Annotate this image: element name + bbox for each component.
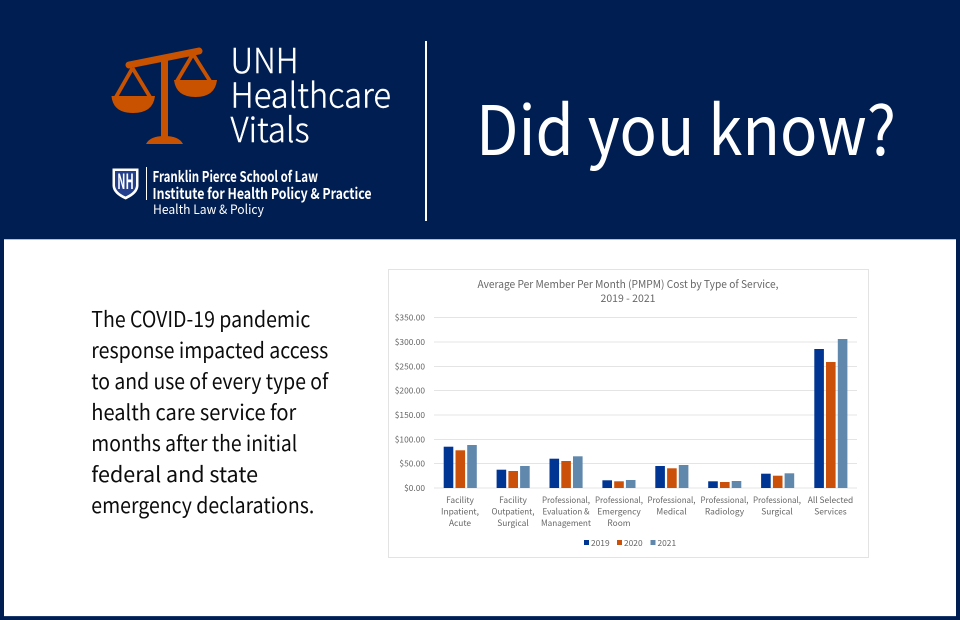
legend [584, 537, 676, 549]
category labels: Professional, [753, 494, 801, 506]
category labels [441, 494, 853, 529]
y axis labels: $50.00 [399, 458, 425, 470]
category labels: Services [814, 506, 847, 518]
bars: 2021 [467, 339, 847, 488]
icon: scales of justice [112, 51, 217, 144]
y axis labels: $350.00 [395, 312, 425, 324]
category labels: Professional, [542, 494, 590, 506]
category labels: Facility [499, 494, 528, 506]
category labels: Acute [449, 517, 471, 529]
logo wordmark: UNH Healthcare Vitals: Healthcare [230, 68, 391, 118]
category labels: Facility [446, 494, 475, 506]
institution names: Institute for Health Policy & Practice [152, 183, 372, 204]
body text: federal and state [91, 458, 258, 489]
chart: average PMPM cost by type of service [388, 270, 868, 558]
bars: 2019 [444, 349, 824, 488]
body text: The COVID-19 pandemic [91, 303, 310, 334]
icon: UNH shield [112, 166, 138, 200]
body text: response impacted access [91, 334, 328, 365]
category labels: Professional, [648, 494, 696, 506]
category labels: Surgical [497, 517, 529, 529]
category labels: Emergency [597, 506, 641, 518]
legend: 2019 [591, 537, 610, 549]
institution names: Health Law & Policy [153, 199, 264, 218]
chart title: Average Per Member Per Month (PMPM) Cost by Type of Service, [478, 277, 779, 292]
category labels: Radiology [705, 506, 745, 518]
header divider [425, 41, 427, 221]
icon: UNH shield: NH [117, 166, 134, 196]
y axis labels: $150.00 [395, 409, 425, 421]
body text [91, 303, 329, 520]
chart title [478, 277, 779, 306]
category labels: All Selected [808, 494, 853, 506]
category labels: Medical [656, 506, 687, 518]
body text: months after the initial [91, 427, 297, 458]
category labels: Professional, [700, 494, 748, 506]
category labels: Management [541, 517, 592, 529]
y axis labels [395, 312, 425, 494]
y axis labels: $250.00 [395, 360, 425, 372]
category labels: Surgical [761, 506, 793, 518]
y axis labels: $0.00 [404, 482, 425, 494]
logo divider [146, 167, 147, 200]
content panel [4, 239, 956, 616]
body text: emergency declarations. [91, 489, 314, 520]
category labels: Professional, [595, 494, 643, 506]
institution names: Franklin Pierce School of Law [152, 166, 318, 187]
institution names [152, 166, 372, 218]
category labels: Inpatient, [441, 506, 479, 518]
logo wordmark: UNH Healthcare Vitals: UNH [230, 34, 298, 83]
body text: to and use of every type of [91, 365, 329, 396]
category labels: Outpatient, [492, 506, 534, 518]
y axis labels: $100.00 [395, 434, 425, 446]
chart title: 2019 - 2021 [601, 291, 656, 306]
category labels: Evaluation & [542, 506, 590, 518]
category labels: Room [607, 517, 631, 529]
legend: 2021 [658, 537, 676, 549]
logo wordmark: UNH Healthcare Vitals: Vitals [230, 103, 310, 152]
y axis labels: $200.00 [395, 384, 425, 396]
body text: health care service for [91, 396, 297, 427]
legend: 2020 [624, 537, 643, 549]
logo wordmark: UNH Healthcare Vitals [230, 34, 391, 152]
bars: 2020 [456, 362, 836, 488]
heading: Did you know?: Did you know? [476, 76, 896, 175]
y axis labels: $300.00 [395, 336, 425, 348]
